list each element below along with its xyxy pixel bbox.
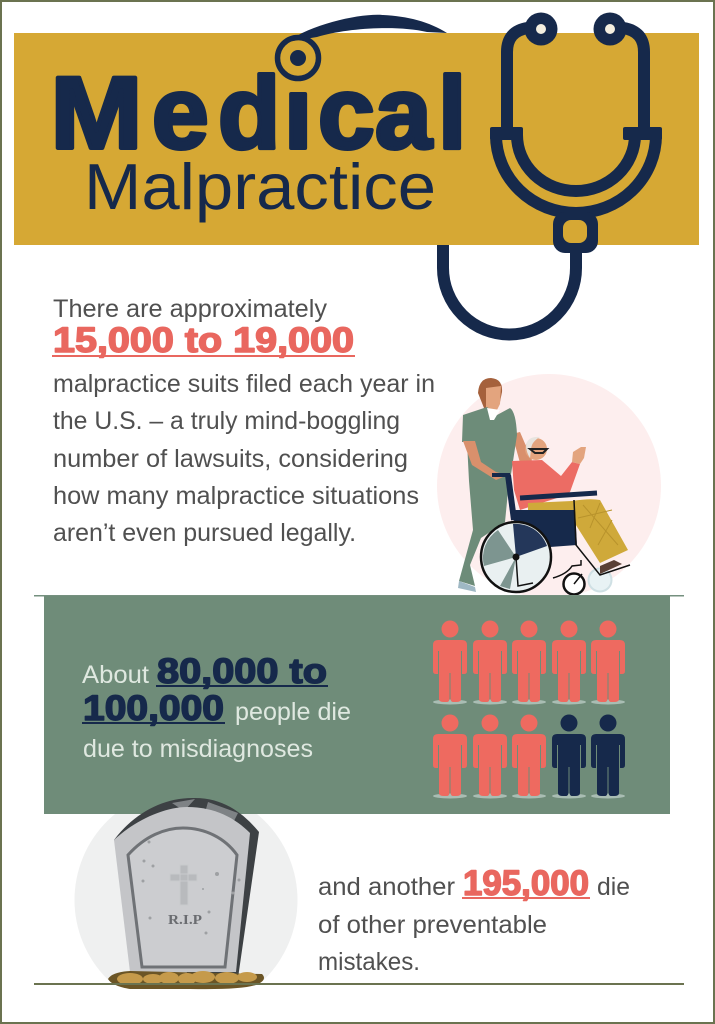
green statistics panel bbox=[34, 595, 684, 814]
text: R.I.P: R.I.P bbox=[168, 913, 202, 928]
title: Medical: M bbox=[50, 56, 142, 170]
bottom text block bbox=[318, 864, 630, 976]
statistic: 15,000 to 19,000: 15,000 to 19,000 bbox=[53, 321, 354, 360]
dirt mound bbox=[108, 971, 264, 989]
bottom text block: mistakes. bbox=[318, 948, 420, 976]
intro text block bbox=[52, 295, 435, 547]
text: misdiagnoses statistic: due to misdiagnoses bbox=[83, 735, 313, 763]
text: misdiagnoses statistic bbox=[82, 652, 351, 763]
illustration: tombstone bbox=[74, 798, 298, 990]
bottom text block: of other preventable bbox=[318, 911, 547, 939]
cross bbox=[170, 865, 197, 905]
bottom text block: die bbox=[597, 873, 630, 901]
intro text block: There are approximately bbox=[53, 295, 327, 323]
text: misdiagnoses statistic: About bbox=[82, 661, 149, 689]
intro text block: malpractice suits filed each year in bbox=[53, 370, 435, 398]
illustration: nurse pushing patient in wheelchair bbox=[437, 374, 661, 598]
title banner bbox=[14, 33, 699, 245]
text: misdiagnoses statistic: people die bbox=[235, 698, 351, 726]
pictogram: 8 of 10 people highlighted bbox=[433, 620, 625, 798]
intro text block: how many malpractice situations bbox=[53, 482, 419, 510]
statistic: 195,000: 195,000 bbox=[463, 864, 589, 903]
subtitle: Malpractice: Malpractice bbox=[84, 150, 436, 223]
icon: stethoscope bbox=[278, 12, 662, 334]
intro text block: the U.S. – a truly mind-boggling bbox=[53, 407, 400, 435]
intro text block: number of lawsuits, considering bbox=[53, 445, 408, 473]
text: misdiagnoses statistic: 100,000 bbox=[83, 689, 224, 728]
title: Medical: edical bbox=[152, 56, 466, 170]
intro text block: aren’t even pursued legally. bbox=[53, 519, 356, 547]
bottom rule bbox=[34, 983, 684, 985]
bottom text block: and another bbox=[318, 873, 455, 901]
text: misdiagnoses statistic: 80,000 to bbox=[157, 652, 327, 691]
